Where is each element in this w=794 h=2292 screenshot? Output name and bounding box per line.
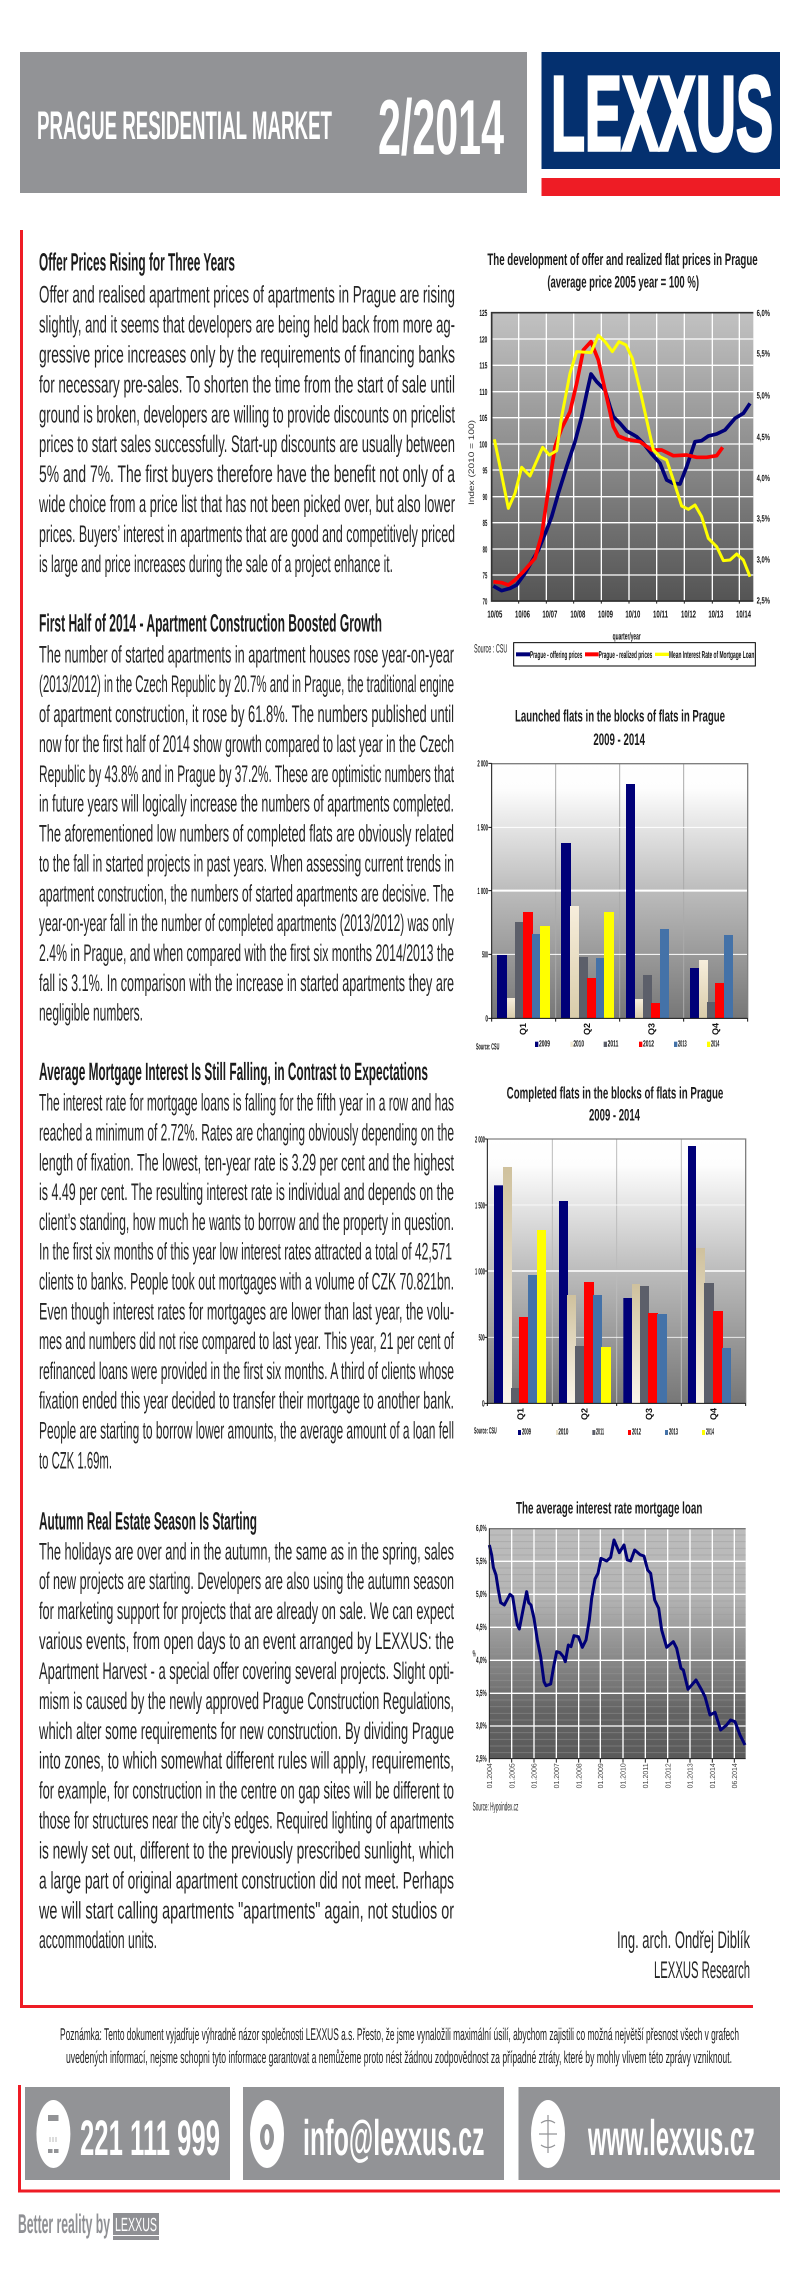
article: autumn season: Autumn Real Estate Season Is Starting	[39, 1507, 257, 1535]
tagline: better reality by lexxus: Better reality by	[18, 2209, 110, 2239]
body text: is large and price increases during the sale of a project enhance it.	[39, 551, 393, 578]
body text: negligible numbers.	[39, 1000, 143, 1027]
bars: quarter 4	[688, 1146, 731, 1403]
chart: average mortgage interest rate	[473, 1498, 746, 1813]
chart: offer and realized prices: Source : CSU	[474, 642, 507, 655]
legend: 2009	[522, 1426, 531, 1436]
legend	[518, 1426, 714, 1436]
contact: phone	[25, 2087, 230, 2180]
quarter labels: Q1	[515, 1408, 525, 1420]
right axis labels: 3,5%	[757, 514, 770, 524]
legend	[535, 1039, 719, 1049]
chart: completed flats	[474, 1083, 746, 1436]
date labels: 01.2014	[708, 1763, 717, 1788]
y axis labels: 5,0%	[476, 1589, 487, 1599]
chart: offer and realized prices: 95	[483, 465, 487, 475]
chart: offer and realized prices	[467, 250, 770, 666]
legend: Prague - offering prices	[530, 649, 582, 660]
plot background	[489, 1528, 746, 1759]
legend: 2012	[643, 1039, 654, 1049]
quarter labels: Q2	[582, 1023, 592, 1035]
quarter labels: Q1	[518, 1023, 528, 1035]
plot background	[492, 763, 748, 1018]
y axis labels: 5,5%	[476, 1556, 487, 1566]
date labels: 01.2013	[686, 1763, 694, 1788]
axis titles	[467, 420, 641, 642]
bottom axis labels: 10/11	[653, 609, 668, 620]
y axis labels	[477, 759, 488, 1024]
left axis labels: 120	[479, 334, 487, 344]
bars: quarter 3	[626, 784, 669, 1018]
contact: website	[518, 2087, 780, 2180]
body text: wide choice from a price list that has not been picked over, but also lower	[38, 491, 455, 518]
body text: which alter some requirements for new construction. By dividing Prague	[38, 1718, 454, 1745]
axis titles: Index (2010 = 100)	[467, 420, 476, 505]
quarter labels	[515, 1408, 718, 1420]
bars: quarter 1	[497, 912, 550, 1018]
article: mortgage interest	[39, 1058, 454, 1474]
bottom axis labels: 10/14	[736, 609, 751, 620]
contact: email	[243, 2087, 504, 2180]
date labels	[485, 1763, 739, 1788]
y axis labels: 3,5%	[476, 1688, 487, 1698]
y axis labels: %	[473, 1649, 476, 1659]
body text	[39, 1090, 454, 1474]
bars: quarter 4	[690, 935, 733, 1018]
y axis labels: 4,5%	[476, 1622, 487, 1632]
tagline: better reality by lexxus: LEXXUS	[115, 2215, 157, 2236]
date labels: 01.2009	[596, 1763, 605, 1788]
body text: is newly set out, different to the previously prescribed sunlight, which	[39, 1838, 454, 1864]
chart: completed flats: 1 000	[475, 1266, 485, 1276]
y axis labels: 0	[482, 1399, 485, 1409]
body text: 5% and 7%. The first buyers therefore have the benefit not only of a	[39, 461, 455, 488]
y axis labels: 0	[485, 1014, 488, 1024]
date labels: 01.2005	[508, 1763, 516, 1788]
y axis labels	[473, 1523, 487, 1763]
chart: offer and realized prices: quarter/year	[613, 631, 641, 642]
line: interest rate	[489, 1540, 745, 1745]
body text: gressive price increases only by the requirements of financing banks	[39, 342, 455, 368]
chart title	[515, 707, 725, 749]
body text: into zones, to which somewhat different rules will apply, requirements,	[39, 1748, 454, 1775]
body text: to CZK 1.69m.	[39, 1447, 112, 1474]
body text: a large part of original apartment construction did not meet. Perhaps	[39, 1867, 454, 1894]
date labels: 01.2008	[575, 1763, 583, 1788]
quarter labels: Q4	[708, 1408, 718, 1420]
y axis labels: 2,5%	[476, 1753, 487, 1763]
right axis labels	[757, 308, 770, 605]
date labels: 01.2012	[664, 1763, 672, 1788]
right axis labels: 4,0%	[757, 473, 770, 483]
article: first half of 2014	[39, 610, 454, 1027]
legend: 2011	[608, 1039, 618, 1049]
line: offering prices	[493, 374, 750, 591]
chart title: 2009 - 2014	[593, 730, 645, 749]
y axis labels	[475, 1134, 485, 1409]
date labels: 01.2004	[485, 1763, 494, 1788]
tagline: better reality by lexxus	[18, 2209, 159, 2240]
chart title	[507, 1083, 723, 1124]
issue number: 2/2014	[378, 83, 504, 171]
body text: for necessary pre-sales. To shorten the time from the start of sale until	[39, 371, 455, 398]
right axis labels: 3,0%	[757, 555, 770, 565]
left axis labels: 100	[479, 439, 487, 449]
body text: for example, for construction in the centre on gap sites will be different to	[39, 1778, 454, 1805]
left axis labels: 115	[479, 361, 487, 371]
body text	[39, 641, 454, 1027]
bars: quarter 1	[494, 1167, 546, 1403]
chart: completed flats: 500	[479, 1333, 485, 1343]
email address: info@lexxus.cz	[303, 2110, 484, 2166]
date labels: 01.2011	[641, 1763, 650, 1788]
quarter labels: Q2	[580, 1408, 590, 1420]
chart: completed flats: 2014	[706, 1426, 714, 1436]
bottom axis labels: 10/10	[625, 609, 640, 620]
body text: slightly, and it seems that developers are being held back from more ag-	[39, 312, 455, 339]
legend: 2010	[573, 1039, 584, 1049]
bottom axis labels: 10/13	[708, 609, 723, 620]
chart: launched flats: 1 000	[477, 886, 488, 896]
quarter labels: Q4	[710, 1023, 720, 1035]
article: first half of 2014: First Half of 2014 - Apartment Construction Boosted Growth	[39, 610, 382, 638]
chart: offer and realized prices: 85	[483, 518, 487, 528]
phone number: 221 111 999	[80, 2110, 220, 2166]
left axis labels: 110	[479, 387, 487, 397]
legend: 2012	[632, 1426, 641, 1436]
plot background	[492, 313, 753, 601]
body text	[38, 1538, 454, 1954]
chart: launched flats: Source: CSU	[476, 1041, 499, 1051]
quarter labels	[518, 1023, 720, 1035]
disclaimer note	[60, 2025, 739, 2067]
body text: mism is caused by the newly approved Prague Construction Regulations,	[39, 1688, 454, 1715]
legend	[514, 643, 755, 666]
chart: completed flats: 1 500	[475, 1200, 485, 1210]
chart: completed flats: 2 000	[475, 1134, 485, 1144]
left axis labels	[479, 308, 487, 606]
body text	[38, 282, 455, 578]
chart: completed flats: Source: CSU	[474, 1425, 497, 1435]
legend: 2010	[558, 1426, 568, 1436]
chart: launched flats: 500	[482, 950, 488, 960]
header banner: PRAGUE RESIDENTIAL MARKET	[37, 104, 332, 148]
date labels: 01.2010	[619, 1763, 627, 1788]
right axis labels: 4,5%	[757, 432, 770, 442]
right axis labels: 5,5%	[757, 349, 770, 359]
bars: quarter 3	[623, 1284, 667, 1403]
article: offer prices: Offer Prices Rising for Three Years	[39, 249, 235, 277]
body text: accommodation units.	[39, 1927, 157, 1954]
line: mortgage rate	[494, 335, 750, 577]
plot background	[487, 1139, 746, 1403]
body text: various events, from open days to an event arranged by LEXXUS: the	[39, 1628, 454, 1655]
chart: average mortgage interest rate: Source: Hypoindex.cz	[473, 1800, 518, 1813]
chart title	[487, 250, 758, 291]
left axis labels: 105	[479, 413, 487, 423]
chart: offer and realized prices: 70	[483, 596, 487, 606]
legend: 2013	[678, 1039, 687, 1049]
y axis labels: 3,0%	[476, 1721, 487, 1731]
chart: launched flats: 2014	[711, 1039, 719, 1049]
bottom axis labels: 10/09	[598, 609, 613, 620]
body text: Offer and realised apartment prices of apartments in Prague are rising	[39, 282, 455, 309]
icon: globe	[531, 2100, 565, 2168]
y axis labels: 6,0%	[476, 1523, 487, 1533]
article: autumn season	[38, 1507, 454, 1954]
left axis labels: 125	[479, 308, 487, 318]
right axis labels: 6,0%	[757, 308, 770, 318]
bottom axis labels: 10/08	[570, 609, 585, 620]
body text: prices to start sales successfully. Start-up discounts are usually between	[39, 431, 455, 458]
date labels: 01.2007	[552, 1763, 561, 1788]
header banner	[20, 52, 527, 193]
chart: offer and realized prices: 80	[483, 544, 487, 554]
chart: launched flats: 1 500	[477, 823, 488, 833]
body text: ground is broken, developers are willing to provide discounts on pricelist	[39, 401, 455, 428]
legend: Prague - realized prices	[599, 649, 652, 660]
date labels: 06.2014	[730, 1763, 739, 1788]
chart: offer and realized prices: 75	[483, 570, 487, 580]
chart: launched flats	[476, 707, 748, 1051]
icon: at sign	[250, 2100, 284, 2168]
legend: 2013	[669, 1426, 678, 1436]
body text: we will start calling apartments "apartments" again, not studios or	[38, 1897, 454, 1924]
body text: Apartment Harvest - a special offer covering several projects. Slight opti-	[39, 1658, 454, 1685]
quarter labels: Q3	[646, 1023, 656, 1035]
line: realized prices	[493, 342, 723, 585]
chart: offer and realized prices: 90	[483, 492, 487, 502]
chart: launched flats: 2 000	[477, 759, 488, 769]
legend: 2011	[596, 1426, 604, 1436]
bottom axis labels: 10/06	[515, 609, 530, 620]
right axis labels: 5,0%	[757, 390, 770, 400]
quarter labels: Q3	[644, 1408, 654, 1420]
right axis labels: 2,5%	[757, 595, 770, 605]
bottom axis labels: 10/12	[681, 609, 696, 620]
red frame of the contact panel	[20, 2085, 780, 2191]
red frame of the article panel	[22, 230, 753, 2006]
author signature	[617, 1927, 751, 1984]
legend: 2009	[539, 1039, 550, 1049]
bars: quarter 2	[559, 1201, 611, 1403]
y axis labels: 4,0%	[476, 1655, 487, 1665]
date labels: 01.2006	[530, 1763, 538, 1788]
icon: phone	[36, 2100, 70, 2168]
bottom axis labels: 10/07	[542, 609, 557, 620]
article: offer prices	[38, 249, 455, 578]
chart title: 2009 - 2014	[589, 1106, 640, 1124]
bars: quarter 2	[561, 843, 614, 1018]
bottom axis labels	[487, 609, 751, 620]
body text: of apartment construction, it rose by 61.8%. The numbers published until	[39, 701, 454, 728]
bottom axis labels: 10/05	[487, 609, 502, 620]
